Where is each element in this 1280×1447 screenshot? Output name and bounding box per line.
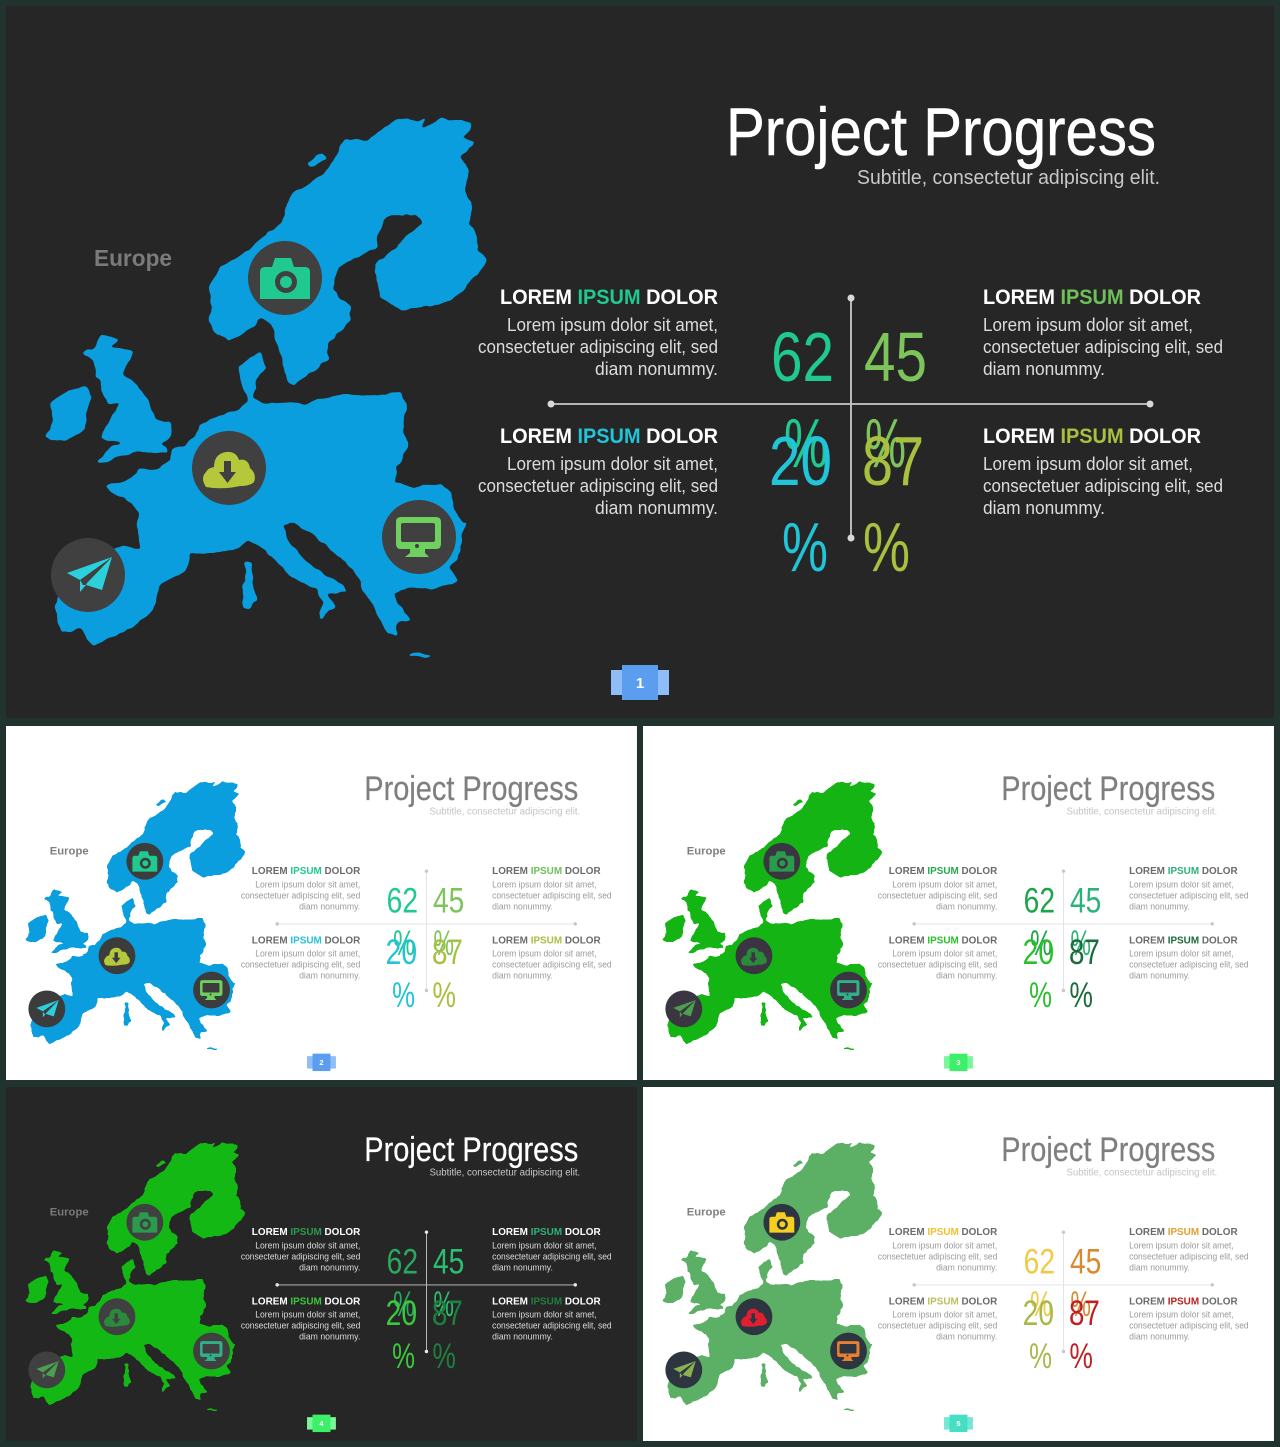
text block: top right: Lorem ipsum dolor sit amet, bbox=[983, 315, 1193, 335]
stat: 45%: % bbox=[1070, 1285, 1091, 1324]
text block: top right: diam nonummy. bbox=[983, 359, 1105, 379]
page badge bbox=[944, 1054, 973, 1071]
text block: top left: consectetuer adipiscing elit, sed bbox=[878, 1252, 997, 1262]
icon: cloud download bbox=[736, 1298, 772, 1335]
icon: monitor bbox=[830, 1333, 867, 1369]
text block: bottom left: LOREM IPSUM DOLOR bbox=[252, 935, 361, 946]
stat: 20% bbox=[1023, 1294, 1054, 1376]
stat: 45%: 45 bbox=[1070, 1242, 1101, 1281]
map label: Europe bbox=[50, 1206, 89, 1218]
panel: main dark slide bbox=[6, 6, 1274, 718]
stat: 87% bbox=[1069, 933, 1100, 1015]
text block: bottom left: diam nonummy. bbox=[936, 1332, 997, 1342]
text block: bottom left: consectetuer adipiscing elit, sed bbox=[478, 476, 718, 496]
text block: top left: consectetuer adipiscing elit, sed bbox=[878, 891, 997, 901]
text block: bottom right: consectetuer adipiscing elit, sed bbox=[1129, 960, 1249, 970]
icon: camera bbox=[248, 241, 322, 315]
stat: 87%: % bbox=[863, 508, 910, 586]
text block: bottom right: Lorem ipsum dolor sit amet, bbox=[1129, 1310, 1234, 1320]
stat: 20%: % bbox=[1029, 1337, 1052, 1376]
icon: cloud download bbox=[99, 1298, 135, 1335]
icon: paper plane bbox=[28, 991, 65, 1027]
icon: cloud download bbox=[192, 431, 266, 505]
text block: bottom right bbox=[1129, 1296, 1249, 1342]
slide background bbox=[6, 6, 1274, 718]
map label: Europe bbox=[687, 845, 726, 857]
map of Europe bbox=[45, 118, 487, 657]
text block: top left: Lorem ipsum dolor sit amet, bbox=[255, 880, 360, 890]
icon: monitor bbox=[382, 500, 456, 574]
cross lines bbox=[548, 294, 1154, 542]
text block: bottom right: consectetuer adipiscing elit, sed bbox=[983, 476, 1223, 496]
text block: top right: diam nonummy. bbox=[1129, 1262, 1190, 1272]
stat: 62% bbox=[1024, 881, 1055, 963]
stat: 62% bbox=[771, 318, 834, 482]
text block: bottom left: diam nonummy. bbox=[595, 498, 718, 518]
text block: bottom right bbox=[492, 935, 612, 981]
cross lines bbox=[912, 869, 1214, 992]
cross lines bbox=[912, 1230, 1214, 1353]
stat: 45%: % bbox=[1070, 924, 1091, 963]
text block: top left: diam nonummy. bbox=[299, 901, 360, 911]
slide background bbox=[643, 726, 1274, 1080]
cross lines bbox=[275, 1230, 577, 1353]
text block: top right bbox=[983, 286, 1223, 379]
icon: cloud download bbox=[99, 937, 135, 974]
text block: top left: consectetuer adipiscing elit, sed bbox=[241, 1252, 360, 1262]
stat: 20% bbox=[386, 933, 417, 1015]
text block: bottom right: Lorem ipsum dolor sit amet, bbox=[492, 1310, 597, 1320]
page badge: 1 bbox=[636, 675, 644, 692]
stat: 62%: % bbox=[784, 404, 828, 482]
stat: 62%: 62 bbox=[1024, 881, 1055, 920]
stat: 45% bbox=[433, 1242, 464, 1324]
stat: 62%: % bbox=[1030, 924, 1052, 963]
text block: top left bbox=[878, 1227, 998, 1272]
text block: top left: consectetuer adipiscing elit, sed bbox=[241, 891, 360, 901]
title: Project Progress bbox=[1001, 770, 1215, 808]
stat: 62% bbox=[1024, 1242, 1055, 1324]
text block: top left: Lorem ipsum dolor sit amet, bbox=[892, 1241, 997, 1251]
stat: 45%: 45 bbox=[1070, 881, 1101, 920]
text block: bottom left: Lorem ipsum dolor sit amet, bbox=[892, 1310, 997, 1320]
stat: 87%: % bbox=[432, 976, 456, 1015]
stat: 62%: % bbox=[1030, 1285, 1052, 1324]
stat: 20%: 20 bbox=[386, 1294, 417, 1333]
icon: camera bbox=[126, 1204, 163, 1241]
stat: 87% bbox=[432, 1294, 463, 1376]
text block: top left bbox=[241, 866, 361, 911]
stat: 87% bbox=[862, 422, 924, 586]
text block: bottom left bbox=[878, 935, 998, 981]
stat: 20%: 20 bbox=[1023, 933, 1054, 972]
text block: bottom left: LOREM IPSUM DOLOR bbox=[252, 1296, 361, 1307]
text block: top right: diam nonummy. bbox=[492, 1262, 553, 1272]
stat: 45% bbox=[864, 318, 927, 482]
page badge bbox=[307, 1415, 336, 1432]
icon: paper plane bbox=[51, 538, 125, 612]
stat: 45% bbox=[1070, 881, 1101, 963]
panel: white blue slide bbox=[6, 726, 637, 1080]
stat: 87% bbox=[432, 933, 463, 1015]
subtitle: Subtitle, consectetur adipiscing elit. bbox=[429, 1168, 580, 1179]
page badge bbox=[944, 1415, 973, 1432]
icon: paper plane bbox=[28, 1352, 65, 1388]
text block: top left: Lorem ipsum dolor sit amet, bbox=[892, 880, 997, 890]
title: Project Progress bbox=[1001, 1131, 1215, 1169]
stat: 45%: 45 bbox=[433, 881, 464, 920]
text block: bottom right: consectetuer adipiscing elit, sed bbox=[492, 1321, 612, 1331]
stat: 87%: 87 bbox=[432, 1294, 463, 1333]
text block: bottom left: Lorem ipsum dolor sit amet, bbox=[255, 949, 360, 959]
page badge: 5 bbox=[956, 1419, 961, 1428]
text block: top left bbox=[478, 286, 718, 379]
text block: top right: consectetuer adipiscing elit, sed bbox=[492, 891, 612, 901]
slide background bbox=[6, 1087, 637, 1441]
icon: monitor bbox=[830, 972, 867, 1008]
panel: dark green slide bbox=[6, 1087, 637, 1441]
text block: bottom left: LOREM IPSUM DOLOR bbox=[500, 425, 718, 448]
cross lines bbox=[275, 869, 577, 992]
text block: bottom left: consectetuer adipiscing elit, sed bbox=[878, 1321, 997, 1331]
text block: bottom right bbox=[492, 1296, 612, 1342]
icon: cloud download bbox=[736, 937, 772, 974]
stat: 87%: 87 bbox=[862, 422, 924, 500]
text block: top right: LOREM IPSUM DOLOR bbox=[1129, 1227, 1238, 1238]
text block: bottom left: diam nonummy. bbox=[299, 971, 360, 981]
text block: top right: LOREM IPSUM DOLOR bbox=[492, 866, 601, 877]
icon: camera bbox=[763, 1204, 800, 1241]
text block: top right bbox=[492, 866, 612, 911]
text block: bottom left: LOREM IPSUM DOLOR bbox=[889, 935, 998, 946]
text block: bottom right: consectetuer adipiscing elit, sed bbox=[492, 960, 612, 970]
text block: bottom left: consectetuer adipiscing elit, sed bbox=[878, 960, 997, 970]
stat: 62% bbox=[387, 1242, 418, 1324]
text block: bottom right: Lorem ipsum dolor sit amet, bbox=[1129, 949, 1234, 959]
stat: 45%: % bbox=[433, 924, 454, 963]
text block: top left: diam nonummy. bbox=[299, 1262, 360, 1272]
map of Europe bbox=[662, 782, 882, 1050]
text block: top left bbox=[241, 1227, 361, 1272]
text block: top right: LOREM IPSUM DOLOR bbox=[492, 1227, 601, 1238]
stat: 87%: 87 bbox=[1069, 933, 1100, 972]
text block: top right: LOREM IPSUM DOLOR bbox=[1129, 866, 1238, 877]
stat: 87%: 87 bbox=[432, 933, 463, 972]
subtitle: Subtitle, consectetur adipiscing elit. bbox=[429, 807, 580, 818]
text block: top right: LOREM IPSUM DOLOR bbox=[983, 286, 1201, 309]
icon: camera bbox=[763, 843, 800, 880]
text block: top right bbox=[1129, 866, 1249, 911]
stat: 45%: 45 bbox=[433, 1242, 464, 1281]
text block: top right: Lorem ipsum dolor sit amet, bbox=[1129, 1241, 1234, 1251]
stat: 20%: % bbox=[392, 1337, 415, 1376]
stat: 20% bbox=[1023, 933, 1054, 1015]
text block: top left: Lorem ipsum dolor sit amet, bbox=[507, 315, 718, 335]
text block: bottom right: LOREM IPSUM DOLOR bbox=[1129, 1296, 1238, 1307]
text block: top left: diam nonummy. bbox=[936, 1262, 997, 1272]
text block: top right: diam nonummy. bbox=[1129, 901, 1190, 911]
text block: bottom right: diam nonummy. bbox=[983, 498, 1105, 518]
text block: bottom left bbox=[878, 1296, 998, 1342]
text block: bottom right: diam nonummy. bbox=[492, 1332, 553, 1342]
text block: bottom left: diam nonummy. bbox=[936, 971, 997, 981]
stat: 20%: 20 bbox=[386, 933, 417, 972]
stat: 87% bbox=[1069, 1294, 1100, 1376]
text block: bottom right: consectetuer adipiscing elit, sed bbox=[1129, 1321, 1249, 1331]
stat: 45%: 45 bbox=[864, 318, 927, 396]
stat: 62%: % bbox=[393, 1285, 415, 1324]
text block: bottom left: Lorem ipsum dolor sit amet, bbox=[507, 454, 718, 474]
text block: top right bbox=[492, 1227, 612, 1272]
stat: 62%: 62 bbox=[1024, 1242, 1055, 1281]
text block: top left: diam nonummy. bbox=[936, 901, 997, 911]
panel: white multicolour slide bbox=[643, 1087, 1274, 1441]
icon: monitor bbox=[193, 972, 230, 1008]
text block: top right: consectetuer adipiscing elit, sed bbox=[983, 337, 1223, 357]
text block: bottom right: Lorem ipsum dolor sit amet, bbox=[983, 454, 1193, 474]
slide background bbox=[6, 726, 637, 1080]
text block: bottom left: Lorem ipsum dolor sit amet, bbox=[255, 1310, 360, 1320]
icon: camera bbox=[126, 843, 163, 880]
map of Europe bbox=[25, 782, 245, 1050]
text block: bottom right: LOREM IPSUM DOLOR bbox=[1129, 935, 1238, 946]
text block: top right: consectetuer adipiscing elit, sed bbox=[1129, 891, 1249, 901]
stat: 20%: % bbox=[782, 508, 828, 586]
text block: bottom right: LOREM IPSUM DOLOR bbox=[492, 1296, 601, 1307]
title: Project Progress bbox=[364, 770, 578, 808]
page badge: 4 bbox=[319, 1419, 324, 1428]
text block: top left: LOREM IPSUM DOLOR bbox=[500, 286, 718, 309]
map of Europe bbox=[25, 1143, 245, 1411]
stat: 87%: % bbox=[432, 1337, 456, 1376]
text block: top left bbox=[878, 866, 998, 911]
text block: bottom right: Lorem ipsum dolor sit amet, bbox=[492, 949, 597, 959]
stat: 87%: % bbox=[1069, 1337, 1093, 1376]
map label: Europe bbox=[94, 245, 172, 271]
icon: paper plane bbox=[665, 991, 702, 1027]
stat: 45% bbox=[1070, 1242, 1101, 1324]
text block: top left: diam nonummy. bbox=[595, 359, 718, 379]
text block: top right bbox=[1129, 1227, 1249, 1272]
text block: bottom left bbox=[241, 1296, 361, 1342]
stat: 62%: 62 bbox=[771, 318, 834, 396]
text block: top right: Lorem ipsum dolor sit amet, bbox=[492, 880, 597, 890]
map label: Europe bbox=[687, 1206, 726, 1218]
stat: 62%: % bbox=[393, 924, 415, 963]
text block: bottom left bbox=[478, 425, 718, 518]
map label: Europe bbox=[50, 845, 89, 857]
text block: top right: Lorem ipsum dolor sit amet, bbox=[492, 1241, 597, 1251]
stat: 62% bbox=[387, 881, 418, 963]
icon: paper plane bbox=[665, 1352, 702, 1388]
text block: bottom left: consectetuer adipiscing elit, sed bbox=[241, 1321, 360, 1331]
stat: 20%: % bbox=[1029, 976, 1052, 1015]
text block: top left: LOREM IPSUM DOLOR bbox=[252, 866, 361, 877]
text block: top left: LOREM IPSUM DOLOR bbox=[252, 1227, 361, 1238]
text block: top right: consectetuer adipiscing elit, sed bbox=[1129, 1252, 1249, 1262]
text block: bottom right: diam nonummy. bbox=[1129, 1332, 1190, 1342]
subtitle: Subtitle, consectetur adipiscing elit. bbox=[857, 167, 1160, 189]
text block: bottom left: consectetuer adipiscing elit, sed bbox=[241, 960, 360, 970]
text block: bottom right: diam nonummy. bbox=[1129, 971, 1190, 981]
page badge: 3 bbox=[956, 1058, 961, 1067]
panel: white green slide bbox=[643, 726, 1274, 1080]
slide background bbox=[643, 1087, 1274, 1441]
text block: top left: LOREM IPSUM DOLOR bbox=[889, 1227, 998, 1238]
subtitle: Subtitle, consectetur adipiscing elit. bbox=[1066, 1168, 1217, 1179]
stat: 45%: % bbox=[865, 404, 906, 482]
stat: 20%: % bbox=[392, 976, 415, 1015]
stat: 87%: 87 bbox=[1069, 1294, 1100, 1333]
stat: 87%: % bbox=[1069, 976, 1093, 1015]
stat: 20%: 20 bbox=[1023, 1294, 1054, 1333]
text block: bottom right: LOREM IPSUM DOLOR bbox=[492, 935, 601, 946]
map of Europe bbox=[662, 1143, 882, 1411]
text block: bottom left: LOREM IPSUM DOLOR bbox=[889, 1296, 998, 1307]
text block: top left: consectetuer adipiscing elit, sed bbox=[478, 337, 718, 357]
text block: top left: LOREM IPSUM DOLOR bbox=[889, 866, 998, 877]
text block: top left: Lorem ipsum dolor sit amet, bbox=[255, 1241, 360, 1251]
stat: 20%: 20 bbox=[769, 422, 832, 500]
stat: 20% bbox=[769, 422, 832, 586]
subtitle: Subtitle, consectetur adipiscing elit. bbox=[1066, 807, 1217, 818]
stat: 62%: 62 bbox=[387, 1242, 418, 1281]
text block: bottom right: diam nonummy. bbox=[492, 971, 553, 981]
stat: 45%: % bbox=[433, 1285, 454, 1324]
page badge bbox=[307, 1054, 336, 1071]
stat: 20% bbox=[386, 1294, 417, 1376]
text block: bottom left bbox=[241, 935, 361, 981]
page badge bbox=[611, 665, 669, 700]
title: Project Progress bbox=[726, 94, 1156, 170]
icon: monitor bbox=[193, 1333, 230, 1369]
text block: bottom left: Lorem ipsum dolor sit amet, bbox=[892, 949, 997, 959]
text block: bottom right bbox=[983, 425, 1223, 518]
text block: top right: diam nonummy. bbox=[492, 901, 553, 911]
stat: 45% bbox=[433, 881, 464, 963]
text block: bottom left: diam nonummy. bbox=[299, 1332, 360, 1342]
page badge: 2 bbox=[319, 1058, 324, 1067]
stat: 62%: 62 bbox=[387, 881, 418, 920]
text block: bottom right: LOREM IPSUM DOLOR bbox=[983, 425, 1201, 448]
text block: top right: Lorem ipsum dolor sit amet, bbox=[1129, 880, 1234, 890]
title: Project Progress bbox=[364, 1131, 578, 1169]
text block: top right: consectetuer adipiscing elit, sed bbox=[492, 1252, 612, 1262]
text block: bottom right bbox=[1129, 935, 1249, 981]
